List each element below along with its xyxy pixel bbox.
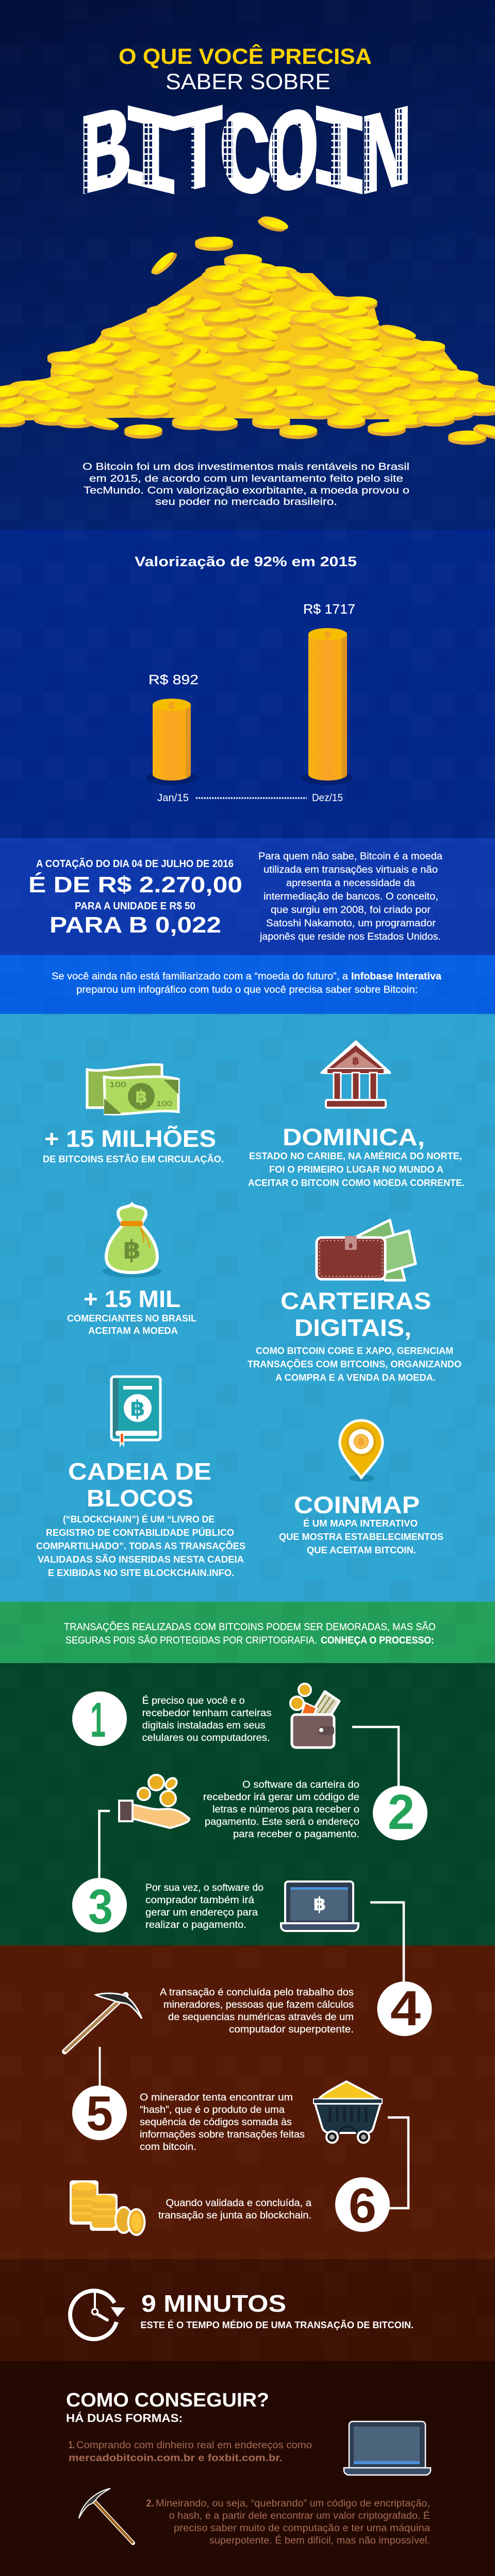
text block: o que é bitcoin: Para quem não sabe, Bitcoin é a moeda — [258, 851, 442, 862]
step 3 — [72, 1878, 358, 1935]
step 1: 1 — [90, 1692, 106, 1748]
icon: laptop — [281, 1882, 358, 1931]
icon: stacks of coins — [70, 2180, 144, 2235]
icon: bank — [322, 1042, 390, 1108]
heading: como conseguir: COMO CONSEGUIR? — [66, 2389, 269, 2411]
icon: book: ฿ — [130, 1396, 145, 1421]
step 6: 6 — [349, 2178, 376, 2233]
icon: money bills — [87, 1064, 178, 1114]
stat: coinmap: COINMAP — [294, 1492, 420, 1518]
text block: transações — [64, 1621, 436, 1646]
step 2: 2 — [388, 1785, 415, 1840]
text block: transações: CONHEÇA O PROCESSO: — [321, 1635, 434, 1646]
intro text: em 2015, de acordo com um levantamento feito pelo site — [89, 473, 403, 484]
bar: Dez/15: ฿ — [324, 629, 331, 641]
stat: 15 milhões: + 15 MILHÕES — [44, 1125, 216, 1152]
value labels: R$ 892 — [148, 672, 199, 687]
bar: Jan/15 — [153, 699, 191, 781]
text block: introdução infobase: Infobase Interativa — [351, 971, 441, 982]
stat: cadeia de blocos: REGISTRO DE CONTABILIDADE PÚBLICO — [46, 1527, 234, 1538]
text block: o que é bitcoin: intermediação de bancos. O conceito, — [263, 891, 438, 902]
stat: 15 mil: + 15 MIL — [84, 1285, 180, 1312]
text: step 6: transação se junta ao blockchain. — [158, 2210, 311, 2221]
text: step 3: gerar um endereço para — [145, 1907, 258, 1918]
text: step 6: Quando validada e concluída, a — [166, 2198, 311, 2209]
intro text: O Bitcoin foi um dos investimentos mais rentáveis no Brasil — [82, 462, 409, 472]
text: step 5: com bitcoin. — [140, 2142, 196, 2153]
heading: como conseguir: HÁ DUAS FORMAS: — [66, 2412, 183, 2425]
stat: cadeia de blocos: (“BLOCKCHAIN”) É UM “LIVRO DE — [63, 1514, 214, 1524]
icon: money bag: ฿ — [123, 1235, 141, 1265]
panel: cotação: PARA A UNIDADE E R$ 50 — [75, 901, 195, 912]
icon: book — [111, 1377, 160, 1446]
stat: cadeia de blocos — [36, 1458, 245, 1578]
title: SABER SOBRE — [166, 70, 331, 94]
panel: cotação: A COTAÇÃO DO DIA 04 DE JULHO DE 2016 — [36, 858, 234, 870]
intro text: TecMundo. Com valorização exorbitante, a moeda provou o — [84, 485, 409, 496]
stat: dominica: FOI O PRIMEIRO LUGAR NO MUNDO A — [269, 1164, 443, 1175]
stat: 15 milhões — [43, 1125, 224, 1164]
text: step 6 — [158, 2198, 311, 2221]
stat: coinmap: QUE MOSTRA ESTABELECIMENTOS — [279, 1532, 443, 1542]
text block: o que é bitcoin — [258, 851, 442, 942]
title: O QUE VOCÊ PRECISA — [119, 44, 372, 69]
stat: cadeia de blocos: VALIDADAS SÃO INSERIDAS NESTA CADEIA — [38, 1554, 244, 1565]
stat: 15 mil: COMERCIANTES NO BRASIL — [67, 1313, 196, 1324]
panel: cotação: PARA B 0,022 — [50, 912, 221, 938]
text: step 4: A transação é concluída pelo trabalho dos — [160, 1987, 354, 1998]
text block: o que é bitcoin: apresenta a necessidade da — [286, 878, 415, 889]
icon: mine cart — [314, 2081, 382, 2143]
stat: carteiras digitais: DIGITAIS, — [294, 1314, 411, 1341]
stat: cadeia de blocos: COMPARTILHADO”. TODAS AS TRANSAÇÕES — [36, 1540, 245, 1551]
title — [119, 44, 372, 94]
stat: cadeia de blocos: E EXIBIDAS NO SITE BLOCKCHAIN.INFO. — [48, 1568, 234, 1578]
text: step 4 — [160, 1987, 354, 2035]
step 1 — [72, 1684, 339, 1748]
text: forma 2: 2. — [146, 2498, 154, 2509]
stat: cadeia de blocos: CADEIA DE — [68, 1458, 211, 1485]
axis labels: Jan/15 — [157, 792, 189, 804]
stat: carteiras digitais: A COMPRA E A VENDA DA MOEDA. — [275, 1372, 436, 1383]
text: forma 2: preciso saber muito de computação e ter uma máquina — [174, 2523, 430, 2534]
stat: dominica: ESTADO NO CARIBE, NA AMÉRICA DO NORTE, — [249, 1150, 462, 1161]
axis labels — [157, 792, 343, 804]
chart heading: Valorização de 92% em 2015 — [135, 554, 357, 569]
stat: 15 mil: ACEITAM A MOEDA — [88, 1326, 178, 1336]
step 3: 3 — [88, 1879, 113, 1935]
stat: coinmap: É UM MAPA INTERATIVO — [303, 1518, 418, 1529]
connectors between steps — [99, 1727, 408, 2208]
icon: laptop large — [344, 2421, 431, 2475]
text: forma 1 — [69, 2440, 312, 2464]
text: step 5: informações sobre transações feitas — [140, 2129, 305, 2140]
icon: pickaxe dark — [79, 2488, 133, 2543]
stat: 9 minutos: ESTE É O TEMPO MÉDIO DE UMA TRANSAÇÃO DE BITCOIN. — [140, 2319, 414, 2330]
text block: introdução infobase: preparou um infográfico com tudo o que você precisa saber sobre Bitcoin: — [76, 985, 418, 995]
text: step 1: celulares ou computadores. — [142, 1733, 270, 1743]
text block: o que é bitcoin: que surgiu em 2008, foi criado por — [271, 905, 431, 916]
text: step 4: computador superpotente. — [229, 2024, 354, 2035]
icon: map pin — [340, 1420, 383, 1482]
text: step 5 — [140, 2092, 305, 2153]
text: forma 1: 1. — [69, 2440, 75, 2451]
stat: carteiras digitais — [248, 1287, 461, 1383]
stat: dominica: DOMINICA, — [283, 1124, 425, 1150]
text: forma 2: o hash, e a partir dele encontrar um valor criptografado. É — [169, 2511, 430, 2521]
stat: 9 minutos: 9 MINUTOS — [141, 2290, 286, 2317]
stat: 15 milhões: DE BITCOINS ESTÃO EM CIRCULAÇÃO. — [43, 1154, 224, 1164]
stat: cadeia de blocos: BLOCOS — [87, 1485, 193, 1512]
intro text — [82, 462, 409, 507]
icon: money bills: 100 — [109, 1080, 126, 1089]
text: forma 2: superpotente. É bem difícil, mas não impossível. — [209, 2535, 430, 2546]
text: forma 1: mercadobitcoin.com.br e foxbit.com.br. — [69, 2453, 283, 2464]
text: step 1: É preciso que você e o — [142, 1696, 245, 1706]
stat: 9 minutos — [140, 2290, 414, 2330]
panel: cotação: É DE R$ 2.270,00 — [28, 872, 242, 897]
icon: pickaxe — [65, 1993, 142, 2052]
text: step 1: digitais instaladas em seus — [142, 1720, 266, 1731]
text: step 3: Por sua vez, o software do — [145, 1883, 263, 1893]
bar chart: valorização 2015 — [146, 601, 355, 804]
panel: cotação — [28, 858, 242, 938]
value labels — [148, 601, 355, 687]
text: step 1: recebedor tenham carteiras — [142, 1708, 272, 1719]
text: step 2: pagamento. Este será o endereço — [205, 1817, 359, 1827]
step 4 — [65, 1981, 432, 2052]
stat: coinmap: QUE ACEITAM BITCOIN. — [307, 1545, 416, 1555]
text: forma 1: Comprando com dinheiro real em endereços como — [76, 2440, 312, 2451]
bar: Dez/15 — [308, 628, 347, 781]
step 5: 5 — [86, 2086, 113, 2141]
stat: dominica — [248, 1124, 465, 1188]
icon: hand with coins — [119, 1775, 189, 1828]
text: step 3: comprador também irá — [145, 1895, 254, 1906]
text: step 2: O software da carteira do — [242, 1780, 359, 1790]
icon: bank: ฿ — [352, 1055, 359, 1067]
text: step 2 — [203, 1780, 359, 1840]
illustration: pile of gold coins — [0, 214, 495, 445]
icon: wallet with bills — [317, 1220, 416, 1280]
heading: como conseguir — [66, 2389, 269, 2425]
icon: money bills: 100 — [156, 1099, 172, 1108]
title: BITCOIN block lettering — [0, 0, 495, 216]
text: step 3 — [145, 1883, 263, 1930]
text: step 3: realizar o pagamento. — [145, 1920, 246, 1930]
icon: map pin: ฿ — [358, 1436, 365, 1448]
text: step 5: sequência de códigos somada às — [140, 2117, 292, 2128]
text: forma 2 — [146, 2498, 430, 2546]
text: step 1 — [142, 1696, 272, 1743]
icon: money bills: ฿ — [135, 1087, 147, 1107]
stat: carteiras digitais: TRANSAÇÕES COM BITCOINS, ORGANIZANDO — [248, 1359, 461, 1369]
stat: dominica: ACEITAR O BITCOIN COMO MOEDA CORRENTE. — [248, 1178, 465, 1188]
bar: Jan/15: ฿ — [168, 699, 175, 711]
step 2 — [119, 1775, 427, 1840]
text: step 5: “hash”, que é o produto de uma — [140, 2105, 285, 2115]
text block: o que é bitcoin: japonês que reside nos Estados Unidos. — [259, 931, 441, 942]
stat: coinmap — [279, 1492, 443, 1555]
step 5 — [72, 2081, 382, 2153]
stat: carteiras digitais: COMO BITCOIN CORE E XAPO, GERENCIAM — [256, 1346, 453, 1356]
text block: transações: SEGURAS POIS SÃO PROTEGIDAS POR CRIPTOGRAFIA. — [65, 1635, 317, 1646]
text: step 2: para receber o pagamento. — [233, 1829, 359, 1840]
text block: introdução infobase: Se você ainda não está familiarizado com a “moeda do futuro”, a — [52, 971, 348, 982]
value labels: R$ 1717 — [303, 601, 355, 617]
text: step 4: mineradores, pessoas que fazem cálculos — [163, 1999, 354, 2010]
stat: carteiras digitais: CARTEIRAS — [280, 1287, 431, 1314]
text block: transações: TRANSAÇÕES REALIZADAS COM BITCOINS PODEM SER DEMORADAS, MAS SÃO — [64, 1621, 436, 1633]
step 4: 4 — [390, 1981, 421, 2036]
text: step 2: letras e números para receber o — [212, 1804, 359, 1815]
intro text: seu poder no mercado brasileiro. — [155, 497, 337, 507]
text block: introdução infobase — [52, 971, 441, 995]
icon: laptop: ฿ — [313, 1894, 326, 1915]
stat: 15 mil — [67, 1285, 196, 1336]
text: step 4: de sequencias numéricas através de um — [168, 2012, 354, 2023]
step 6 — [70, 2177, 390, 2235]
icon: clock — [70, 2291, 125, 2339]
text: step 5: O minerador tenta encontrar um — [140, 2092, 293, 2103]
axis labels: Dez/15 — [312, 792, 343, 804]
text block: o que é bitcoin: Satoshi Nakamoto, um programador — [266, 918, 436, 929]
icon: wallet with cash and coins — [290, 1684, 339, 1748]
text: forma 2: Mineirando, ou seja, “quebrando” um código de encriptação, — [156, 2498, 430, 2509]
icon: money bag — [103, 1204, 161, 1278]
text block: o que é bitcoin: utilizada em transações virtuais e não — [263, 865, 438, 875]
text: step 2: recebedor irá gerar um código de — [203, 1792, 359, 1803]
